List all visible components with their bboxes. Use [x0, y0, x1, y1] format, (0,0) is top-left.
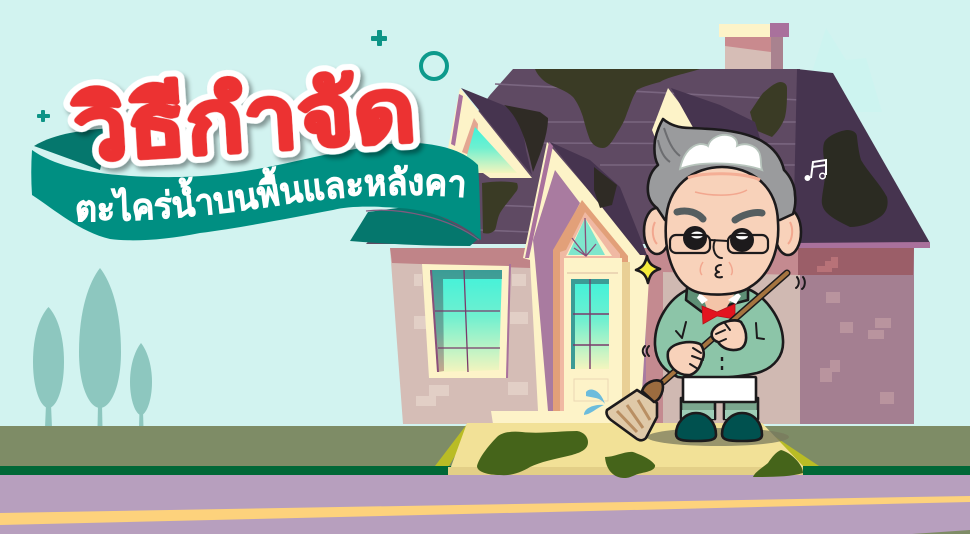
green curb: [0, 466, 970, 475]
eyebrows: [677, 211, 762, 220]
hands: [668, 342, 704, 375]
broom handle: [663, 273, 787, 382]
hair: [648, 119, 795, 220]
title: วิธีกำจัด: [69, 60, 418, 179]
central gable and door bay: [523, 142, 650, 424]
hair strand: [658, 128, 680, 162]
ground: [0, 426, 970, 467]
mouth: [715, 265, 722, 277]
face: [666, 167, 778, 295]
icon: sparkle: [636, 256, 660, 283]
shadow: [647, 428, 789, 446]
bow tie: [702, 304, 735, 324]
house walls: [390, 248, 914, 424]
water drops: [584, 390, 605, 415]
collar: [686, 280, 748, 312]
road: [0, 475, 970, 534]
decorative plus and ring: [37, 30, 447, 122]
jacket buttons: [721, 357, 723, 370]
character: old man sweeping: [606, 119, 805, 446]
ribbon: ตะไคร่น้ำบนพื้นและหลังคา: [76, 164, 464, 222]
cheek lines: [700, 262, 732, 275]
ribbon subtitle: [75, 195, 466, 221]
road centre line: [0, 496, 970, 525]
main roof: [366, 69, 930, 248]
shoes: [676, 413, 716, 441]
title: วิธีกำจัด: [69, 60, 418, 179]
trees: [33, 268, 152, 428]
door panels: [574, 379, 608, 401]
eyes: [683, 226, 707, 250]
moss on roof: [535, 69, 700, 148]
ribbon back fold right: [350, 205, 479, 246]
arm creases: [676, 322, 764, 339]
apron: [683, 377, 756, 402]
icon: music note: [805, 160, 826, 180]
left window: [422, 264, 511, 378]
wall bricks: [414, 274, 528, 406]
ribbon: [31, 128, 481, 246]
gable window: [568, 218, 605, 255]
dark roof flap: [550, 142, 647, 255]
back gable behind head: [652, 88, 762, 150]
door step: [491, 411, 640, 424]
road corner grass: [912, 530, 970, 534]
chimney: [719, 23, 789, 70]
faint background shape: [812, 28, 882, 112]
door window: [571, 279, 609, 401]
neck: [700, 288, 738, 316]
forehead wrinkle: [695, 190, 747, 195]
legs: [681, 398, 758, 419]
broom head: [606, 390, 657, 440]
left gable: [448, 88, 548, 178]
ears: [644, 208, 670, 254]
glasses: [670, 235, 768, 258]
jacket: [655, 289, 783, 378]
sidewalk: [435, 423, 819, 478]
ribbon main band: [31, 143, 481, 240]
ribbon back fold left: [34, 128, 110, 170]
hair highlight: [680, 135, 762, 170]
motion marks: [643, 277, 805, 356]
moss patches on sidewalk: [477, 431, 588, 475]
